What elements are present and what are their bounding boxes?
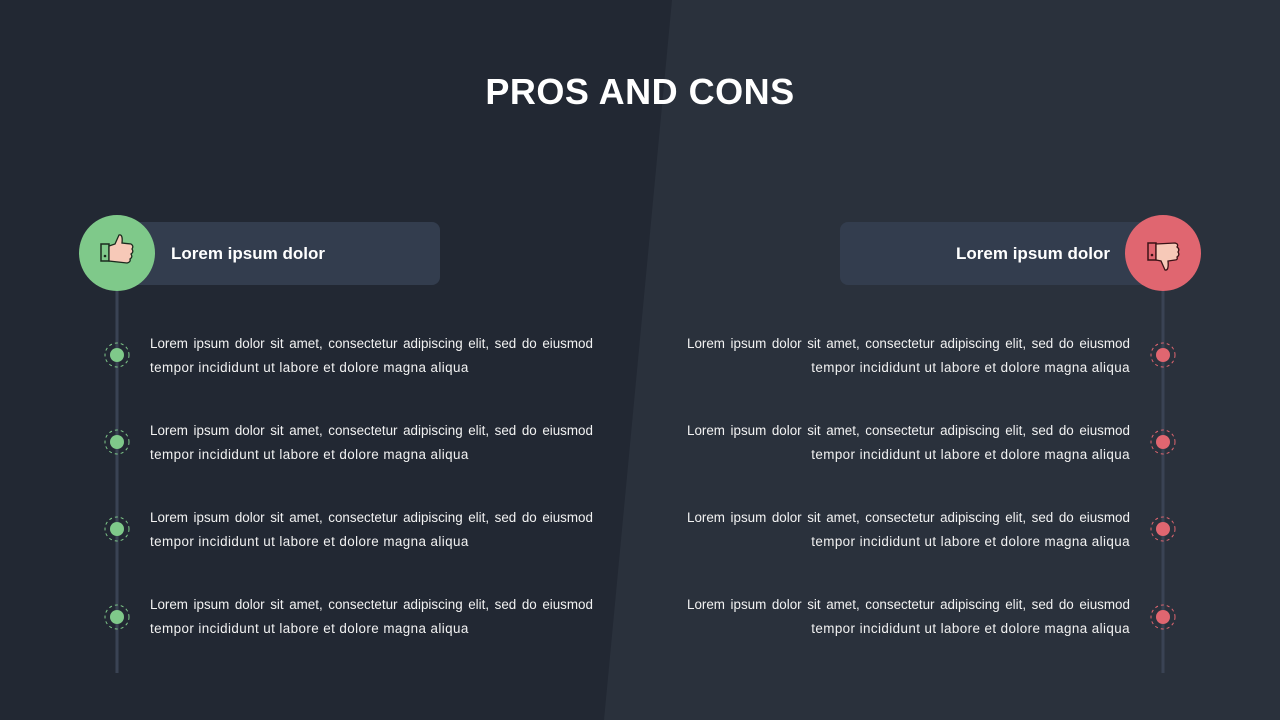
cons timeline xyxy=(1150,291,1176,673)
icon: thumbs down xyxy=(1125,215,1201,291)
cons items xyxy=(687,336,1130,375)
pros items: tempor incididunt ut labore et dolore magna aliqua xyxy=(150,360,469,375)
cons items: consectetur xyxy=(865,336,935,351)
pros items xyxy=(150,336,593,375)
panel: cons: eiusmod xyxy=(1079,423,1130,438)
panel: pros: sit xyxy=(270,510,284,525)
panel: pros: consectetur xyxy=(328,510,398,525)
panel: cons: sit xyxy=(807,597,821,612)
panel: cons: consectetur xyxy=(865,597,935,612)
panel: pros: consectetur xyxy=(328,597,398,612)
panel: cons: adipiscing xyxy=(940,510,1000,525)
panel: pros: sit xyxy=(270,597,284,612)
panel: pros: adipiscing xyxy=(403,597,463,612)
panel: pros: Lorem xyxy=(150,423,188,438)
panel: pros: do xyxy=(522,423,537,438)
panel: cons: ipsum xyxy=(731,597,766,612)
panel: cons: sed xyxy=(1032,423,1053,438)
pros timeline xyxy=(104,291,130,673)
panel: cons: amet, xyxy=(826,597,860,612)
cons items: do xyxy=(1059,336,1074,351)
panel: pros: adipiscing xyxy=(403,510,463,525)
panel: pros: dolor xyxy=(235,423,265,438)
panel: pros: tempor incididunt ut labore et dolore magna aliqua xyxy=(150,447,469,462)
panel: cons: dolor xyxy=(772,423,802,438)
panel: cons: sit xyxy=(807,423,821,438)
pros items: Lorem xyxy=(150,336,188,351)
panel: pros: elit, xyxy=(468,423,489,438)
panel: cons: dolor xyxy=(772,510,802,525)
panel: cons: elit, xyxy=(1005,597,1026,612)
pros items: sit xyxy=(270,336,284,351)
panel: cons: Lorem xyxy=(687,510,725,525)
cons items: sed xyxy=(1032,336,1053,351)
panel: cons: tempor incididunt ut labore et dolore magna aliqua xyxy=(811,621,1130,636)
title: PROS AND CONS xyxy=(485,71,795,112)
panel: pros: eiusmod xyxy=(542,423,593,438)
panel: pros: do xyxy=(522,597,537,612)
panel: pros: sit xyxy=(270,423,284,438)
panel: pros: dolor xyxy=(235,510,265,525)
panel: cons: sed xyxy=(1032,510,1053,525)
panel: cons: eiusmod xyxy=(1079,597,1130,612)
pros items: consectetur xyxy=(328,336,398,351)
panel: pros: elit, xyxy=(468,597,489,612)
pros items: eiusmod xyxy=(542,336,593,351)
panel: pros: dolor xyxy=(235,597,265,612)
panel: pros: consectetur xyxy=(328,423,398,438)
panel: pros: ipsum xyxy=(194,510,229,525)
panel: pros: tempor incididunt ut labore et dolore magna aliqua xyxy=(150,621,469,636)
cons items: eiusmod xyxy=(1079,336,1130,351)
panel: cons: adipiscing xyxy=(940,597,1000,612)
pros items: sed xyxy=(495,336,516,351)
cons items: amet, xyxy=(826,336,860,351)
panel: cons: consectetur xyxy=(865,423,935,438)
panel: pros: sed xyxy=(495,597,516,612)
panel: cons: do xyxy=(1059,510,1074,525)
panel: cons: Lorem xyxy=(687,423,725,438)
pros items: ipsum xyxy=(194,336,229,351)
panel: pros: amet, xyxy=(289,423,323,438)
panel: pros: elit, xyxy=(468,510,489,525)
panel: pros: amet, xyxy=(289,597,323,612)
cons header bar: Lorem ipsum dolor xyxy=(956,244,1110,263)
panel: cons: amet, xyxy=(826,423,860,438)
cons items: elit, xyxy=(1005,336,1026,351)
panel: cons: adipiscing xyxy=(940,423,1000,438)
panel: cons: Lorem xyxy=(687,597,725,612)
panel: cons: tempor incididunt ut labore et dolore magna aliqua xyxy=(811,447,1130,462)
cons items: dolor xyxy=(772,336,802,351)
panel: pros: eiusmod xyxy=(542,597,593,612)
pros header bar: Lorem ipsum dolor xyxy=(171,244,325,263)
panel: cons: tempor incididunt ut labore et dolore magna aliqua xyxy=(811,534,1130,549)
cons items: Lorem xyxy=(687,336,725,351)
panel: cons xyxy=(687,215,1201,673)
panel: pros: sed xyxy=(495,423,516,438)
panel: cons: do xyxy=(1059,597,1074,612)
panel: pros: Lorem xyxy=(150,597,188,612)
panel: pros: sed xyxy=(495,510,516,525)
panel: cons: sit xyxy=(807,510,821,525)
panel: cons: sed xyxy=(1032,597,1053,612)
panel: cons: amet, xyxy=(826,510,860,525)
pros items: amet, xyxy=(289,336,323,351)
pros items: adipiscing xyxy=(403,336,463,351)
cons items: sit xyxy=(807,336,821,351)
pros items: do xyxy=(522,336,537,351)
panel: pros: ipsum xyxy=(194,423,229,438)
panel: cons: dolor xyxy=(772,597,802,612)
pros header bar xyxy=(125,222,440,285)
panel: pros: Lorem xyxy=(150,510,188,525)
panel: cons: consectetur xyxy=(865,510,935,525)
cons items: adipiscing xyxy=(940,336,1000,351)
panel: cons: do xyxy=(1059,423,1074,438)
cons items: ipsum xyxy=(731,336,766,351)
panel: cons: elit, xyxy=(1005,423,1026,438)
panel: pros: amet, xyxy=(289,510,323,525)
icon: thumbs up xyxy=(79,215,155,291)
panel: cons: ipsum xyxy=(731,423,766,438)
pros items: dolor xyxy=(235,336,265,351)
panel: pros: eiusmod xyxy=(542,510,593,525)
cons items: tempor incididunt ut labore et dolore magna aliqua xyxy=(811,360,1130,375)
panel: pros: tempor incididunt ut labore et dolore magna aliqua xyxy=(150,534,469,549)
panel: cons: eiusmod xyxy=(1079,510,1130,525)
panel: cons: elit, xyxy=(1005,510,1026,525)
panel: pros: ipsum xyxy=(194,597,229,612)
panel: pros: adipiscing xyxy=(403,423,463,438)
pros items: elit, xyxy=(468,336,489,351)
cons header bar xyxy=(840,222,1155,285)
panel: cons: ipsum xyxy=(731,510,766,525)
panel: pros xyxy=(79,215,593,673)
panel: pros: do xyxy=(522,510,537,525)
